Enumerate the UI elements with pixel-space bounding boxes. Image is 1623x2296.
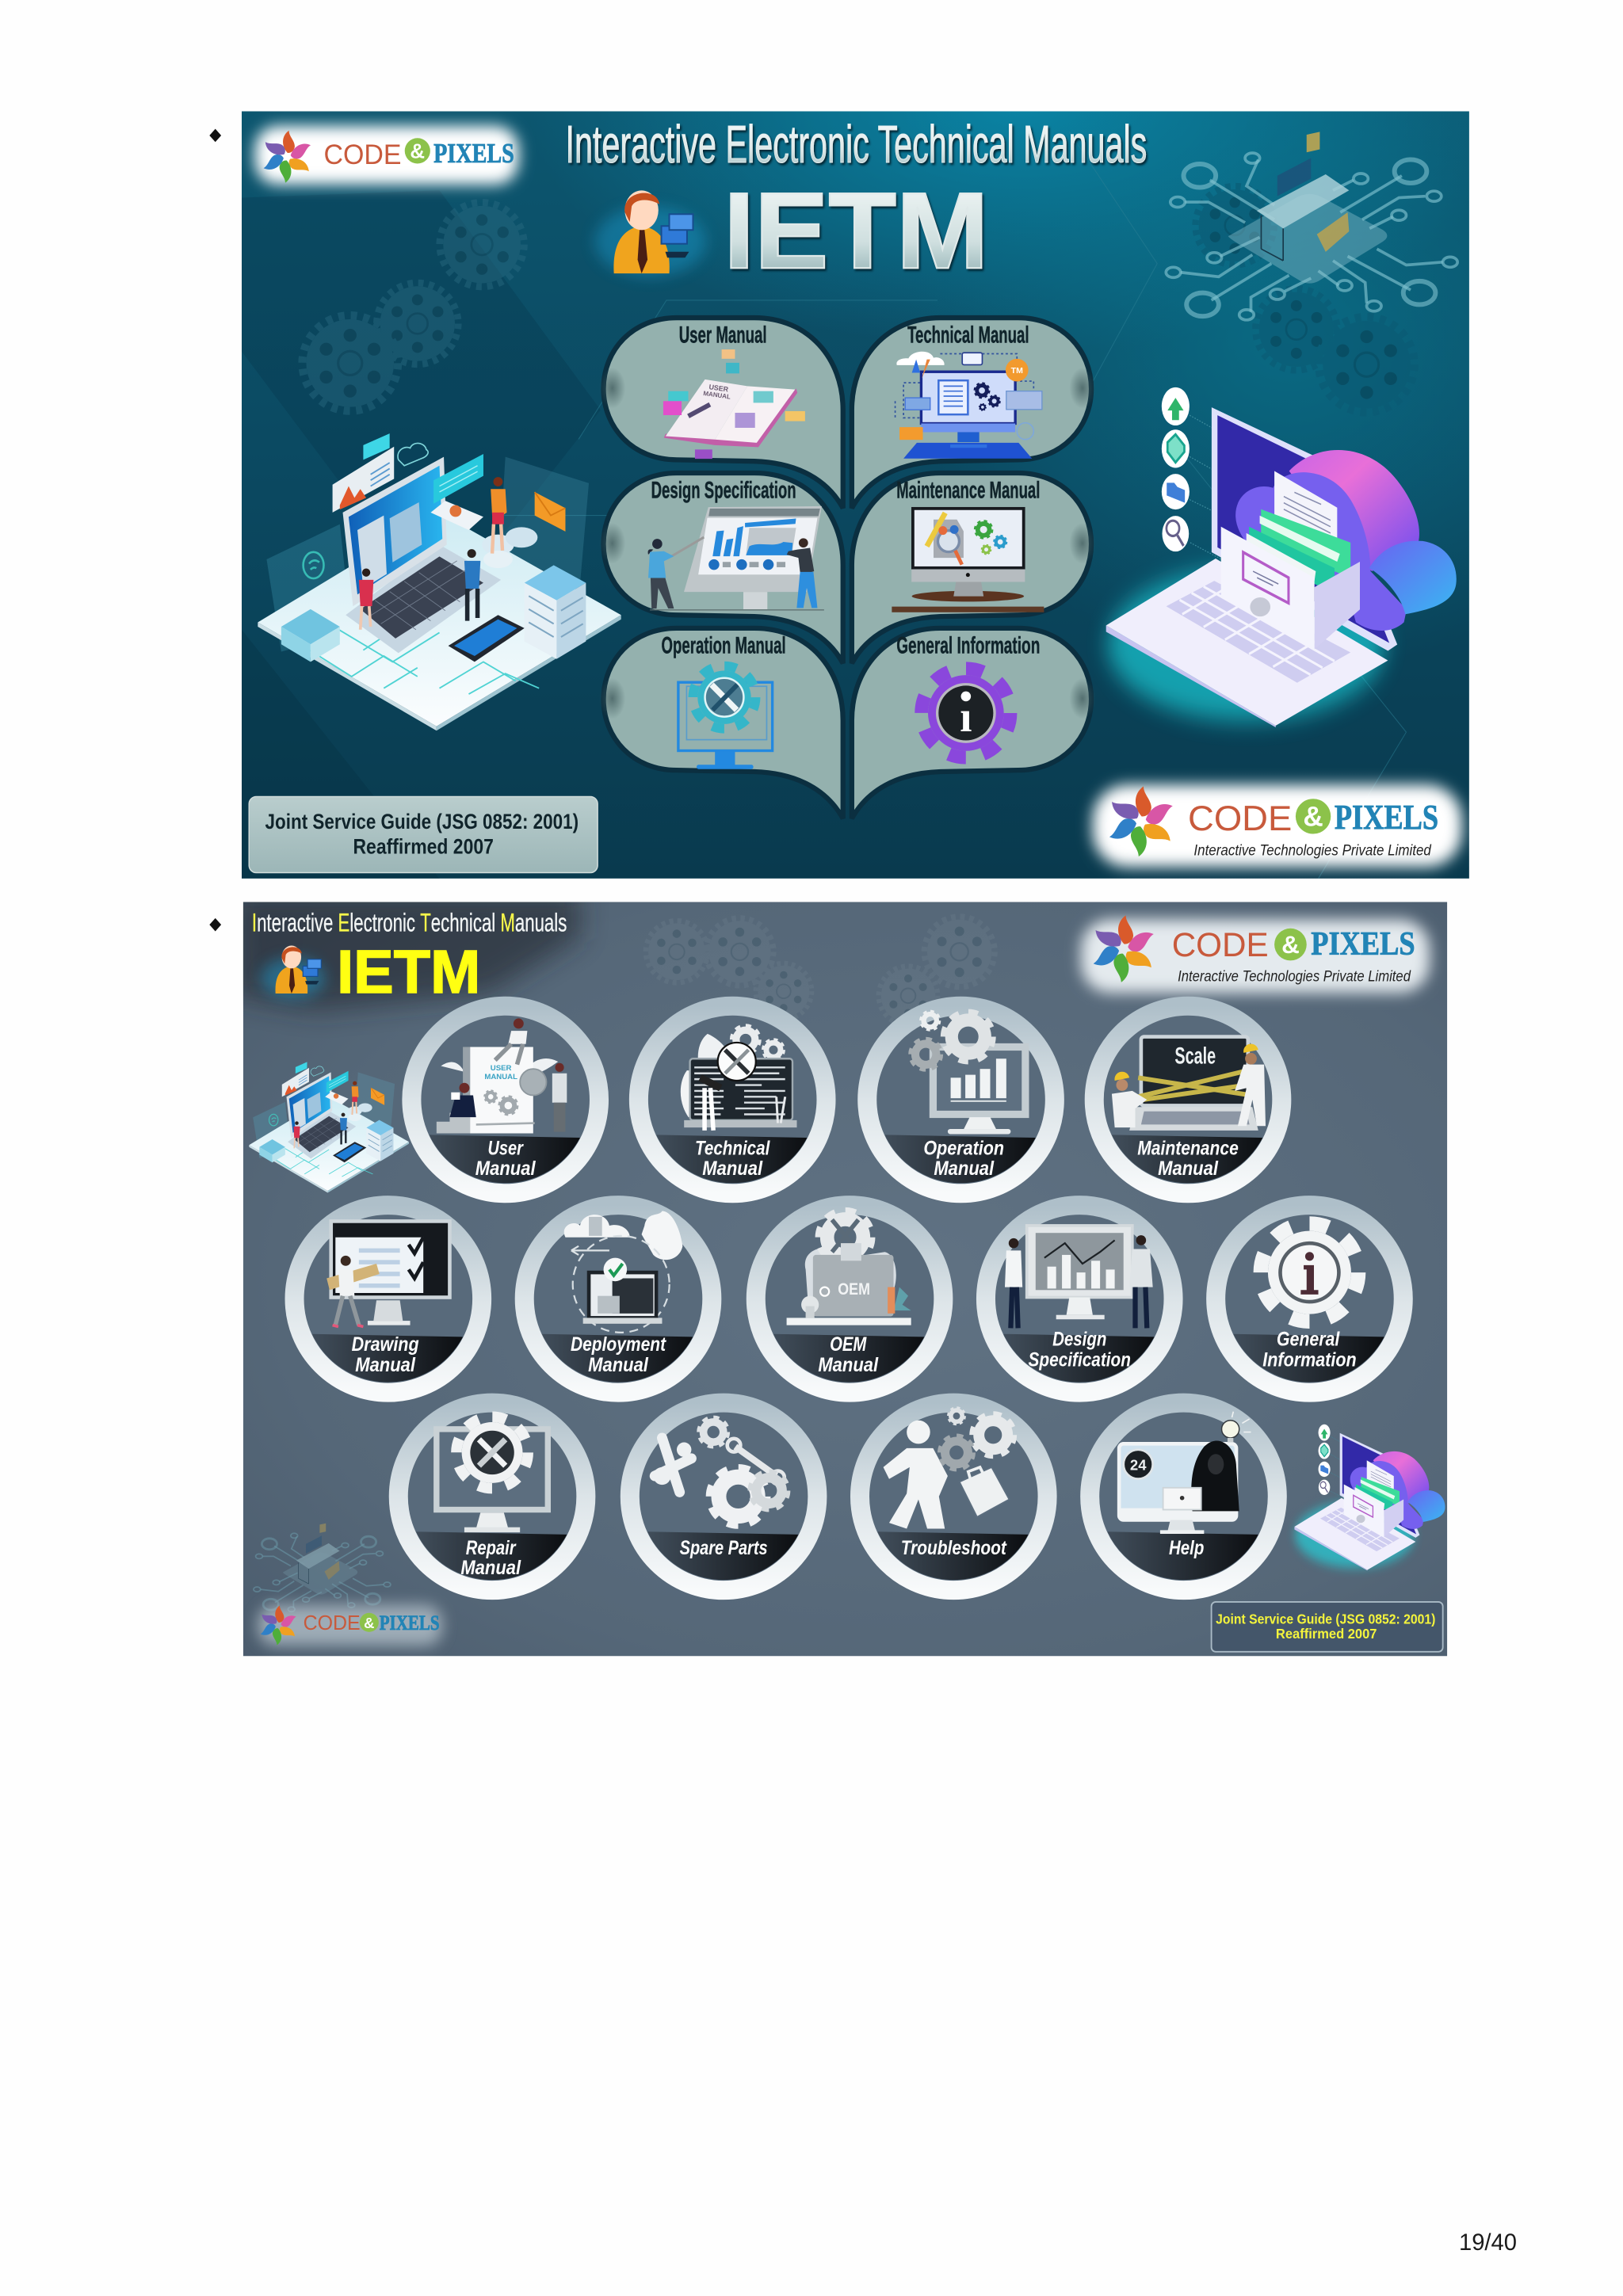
icon: taped off laptop — [1112, 1037, 1266, 1131]
icon: maintenance monitor — [892, 509, 1044, 612]
logo bottom left: CODE — [304, 1612, 361, 1634]
badge: Deployment Manual — [525, 1205, 712, 1393]
badge: User Manual — [411, 1006, 599, 1193]
label: Help — [1169, 1537, 1204, 1559]
badge: Technical Manual — [639, 1006, 826, 1193]
icon: helpdesk monitor — [1119, 1412, 1251, 1534]
illustration: small isometric laptop — [249, 1062, 409, 1192]
main title: Interactive Electronic Technical Manuals — [565, 116, 1147, 174]
illustration: cloud file cabinet laptop — [1106, 387, 1457, 727]
badge: Help — [1090, 1403, 1277, 1590]
badge: Repair Manual — [399, 1403, 586, 1590]
label: Drawing — [352, 1333, 419, 1356]
icon: spare parts — [653, 1417, 788, 1524]
dark shadow behind heading — [235, 893, 580, 1010]
logo top left — [255, 126, 518, 185]
screen word Scale: Scale — [1174, 1043, 1216, 1070]
icon: user at computer — [594, 190, 706, 277]
icon: user manual document — [437, 1018, 567, 1134]
panel: IETM manuals slide — [235, 893, 1447, 1656]
logo top right: Interactive Technologies Private Limited — [1178, 967, 1411, 985]
icon: user manual document: USER — [491, 1064, 512, 1073]
icon: cloud deployment laptop — [564, 1211, 682, 1333]
label: Technical — [695, 1137, 770, 1159]
callout: Joint Service Guide: Joint Service Guide (JSG 0852: 2001) — [265, 810, 579, 833]
label: Manual — [702, 1158, 763, 1180]
IETM heading: IETM — [724, 170, 989, 291]
label: OEM — [830, 1333, 867, 1356]
background gears left — [302, 202, 524, 411]
logo top left: CODE — [323, 139, 401, 170]
label: Spare Parts — [680, 1537, 768, 1559]
logo bottom right: Interactive Technologies Private Limited — [1193, 841, 1432, 859]
logo top left: PIXELS — [433, 138, 514, 169]
label: Repair — [466, 1537, 517, 1559]
icon: technical laptop — [896, 352, 1042, 459]
logo bottom left — [258, 1605, 442, 1646]
label: Manual — [460, 1557, 521, 1579]
bullet marker 1 — [209, 129, 221, 142]
icon: design spec presentation — [648, 506, 824, 610]
clock number: 24 — [1130, 1457, 1147, 1474]
icon: information gear — [1261, 1223, 1358, 1322]
label: Maintenance Manual: Maintenance Manual — [896, 477, 1040, 503]
logo bottom right — [1093, 785, 1462, 867]
circuit desk illustration — [1166, 132, 1457, 320]
badge: Maintenance Manual — [1094, 1006, 1281, 1193]
logo bottom right: CODE — [1188, 799, 1292, 838]
icon: open user manual book — [663, 349, 805, 459]
background gears right — [1192, 183, 1397, 399]
logo top right: & — [1281, 931, 1300, 959]
label: Information — [1262, 1348, 1357, 1371]
logo bottom left: & — [364, 1615, 374, 1631]
panel: IETM overview slide — [242, 111, 1469, 879]
label: Manual — [1158, 1158, 1219, 1180]
label: User — [488, 1137, 524, 1159]
badge: Troubleshoot — [860, 1403, 1048, 1590]
illustration: isometric laptop platform — [258, 433, 621, 730]
label: User Manual: User Manual — [679, 322, 767, 348]
callout: Joint Service Guide — [249, 796, 598, 873]
label: General Information: General Information — [896, 632, 1040, 658]
icon: code laptop with tools — [681, 1026, 797, 1131]
icon: open user manual book: MANUAL — [703, 390, 731, 401]
logo top right: CODE — [1172, 927, 1269, 964]
icon: repair gear monitor — [437, 1417, 548, 1532]
label: Design — [1052, 1329, 1106, 1351]
badge: Operation Manual — [867, 1006, 1055, 1193]
background gears — [646, 917, 995, 1025]
badge: Spare Parts — [630, 1403, 817, 1590]
icon: user at computer — [261, 945, 325, 998]
icon: general information gear: ı — [960, 692, 972, 741]
icon: OEM box and gear: OEM — [838, 1280, 870, 1299]
label: Manual — [475, 1158, 537, 1180]
label: Specification — [1029, 1348, 1131, 1371]
logo top right: PIXELS — [1311, 925, 1415, 963]
icon: general information gear — [922, 669, 1010, 757]
label: Troubleshoot — [901, 1537, 1007, 1559]
label: Maintenance — [1137, 1137, 1239, 1159]
icon: design chart monitor — [1005, 1226, 1153, 1328]
badge: Design Specification — [986, 1205, 1174, 1393]
label: Manual — [818, 1354, 879, 1376]
title: Interactive Electronic Technical Manuals — [252, 908, 567, 936]
logo bottom right: PIXELS — [1335, 797, 1438, 837]
logo bottom right: & — [1303, 801, 1323, 832]
logo top left: & — [410, 141, 425, 163]
label: Design Specification: Design Specification — [651, 477, 796, 503]
icon: user manual document: MANUAL — [484, 1073, 517, 1081]
page number: 19/40 — [1459, 2229, 1517, 2256]
label: Deployment — [571, 1333, 667, 1356]
callout: Joint Service Guide: Joint Service Guide (JSG 0852: 2001) — [1216, 1611, 1435, 1627]
icon: technical laptop: TM — [1011, 366, 1023, 376]
label: Manual — [588, 1354, 649, 1376]
label: Technical Manual: Technical Manual — [907, 322, 1029, 348]
callout: Joint Service Guide: Reaffirmed 2007 — [1276, 1626, 1377, 1642]
logo bottom left: PIXELS — [380, 1611, 440, 1634]
leaf panels — [599, 318, 1096, 818]
label: Operation Manual: Operation Manual — [662, 632, 786, 658]
icon: operation manual gear monitor — [678, 666, 773, 769]
icon: OEM box and gear — [787, 1211, 911, 1325]
callout: Joint Service Guide: Reaffirmed 2007 — [353, 835, 494, 859]
label: Manual — [355, 1354, 416, 1376]
leaf icons — [648, 349, 1044, 769]
icon: drawing monitor — [327, 1221, 449, 1326]
callout: Joint Service Guide — [1212, 1602, 1443, 1652]
icon: open user manual book: USER — [708, 383, 729, 394]
badge: OEM Manual — [756, 1205, 943, 1393]
badge: Drawing Manual — [295, 1205, 482, 1393]
label: General — [1277, 1329, 1340, 1351]
icon: troubleshooter with gears — [884, 1408, 1014, 1529]
icon: gears and chart monitor — [911, 1011, 1025, 1134]
illustration: small cloud laptop — [1294, 1425, 1445, 1570]
badge: General Information — [1216, 1205, 1403, 1393]
label: Operation — [923, 1137, 1004, 1159]
label: Manual — [934, 1158, 995, 1180]
IETM heading: IETM — [337, 939, 480, 1006]
bullet marker 2 — [209, 918, 221, 931]
illustration: faint circuit desk — [254, 1524, 391, 1611]
logo top right — [1081, 914, 1430, 993]
